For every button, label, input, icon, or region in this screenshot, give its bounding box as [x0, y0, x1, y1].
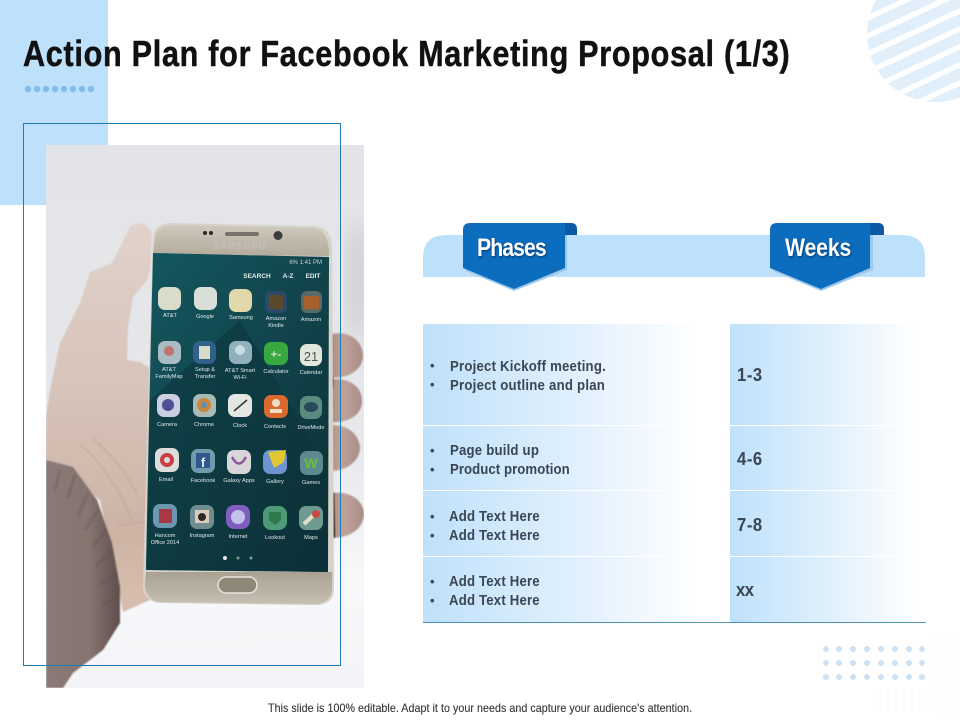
app icon grid: W	[304, 455, 318, 471]
status bar and menu: 6% 1:41 PM	[289, 260, 322, 266]
row 2 phases: Product promotion	[450, 460, 570, 477]
app labels: FamilyMap	[155, 374, 183, 380]
status bar and menu: SEARCH	[243, 273, 271, 280]
status bar and menu: A-Z	[283, 273, 293, 280]
app labels: AT&T	[162, 367, 177, 373]
ribbon: Weeks	[770, 223, 884, 291]
app labels: Chrome	[194, 422, 214, 428]
home button	[218, 577, 257, 593]
app labels: AT&T	[163, 313, 178, 319]
weeks column backgrounds	[730, 324, 926, 622]
title: Action Plan for Facebook Marketing Proposal (1/3)	[23, 35, 790, 75]
label: Phases: Phases	[477, 233, 547, 261]
app labels: Clock	[233, 423, 247, 429]
ribbon: Phases	[463, 223, 577, 291]
app labels: Lookout	[265, 535, 285, 541]
app labels: Email	[159, 477, 173, 483]
status bar and menu	[243, 260, 322, 280]
row 1 weeks: 1-3	[737, 364, 762, 385]
app labels: Amazon	[266, 316, 286, 322]
app labels: Calendar	[300, 370, 322, 376]
phone top details	[203, 231, 282, 251]
row 4 phases: Add Text Here	[449, 591, 540, 608]
page indicator dots	[223, 556, 252, 560]
app labels: Camera	[157, 422, 178, 428]
table	[423, 324, 926, 623]
app icon grid: +-	[270, 347, 282, 361]
row 2 phases	[430, 441, 570, 477]
sleeve ribbing	[54, 470, 99, 566]
row 3 phases: Add Text Here	[449, 507, 540, 524]
finger shadows at phone edge	[332, 376, 336, 539]
row 1 phases	[430, 357, 606, 393]
app icon grid: f	[201, 455, 206, 470]
table bottom rule	[423, 622, 926, 623]
app labels: Games	[302, 480, 320, 486]
app labels: Hancom	[155, 533, 176, 539]
app labels: Maps	[304, 535, 318, 541]
table header band	[423, 235, 925, 277]
decorative dots under title	[25, 86, 94, 92]
app icon grid	[153, 287, 323, 530]
decorative light blue corner block	[0, 0, 108, 205]
app labels	[151, 313, 325, 546]
app labels: AT&T Smart	[225, 368, 256, 374]
app labels: Transfer	[195, 374, 215, 380]
app labels: Setup &	[195, 367, 215, 373]
row 1 phases: Project outline and plan	[450, 376, 605, 393]
app labels: Calculator	[263, 369, 289, 375]
row 4 phases: Add Text Here	[449, 572, 540, 589]
row 4 phases	[430, 572, 540, 608]
footer note: This slide is 100% editable. Adapt it to your needs and capture your audience's attention.	[268, 703, 692, 715]
thin photo frame	[24, 124, 340, 666]
row 2 phases: •	[430, 462, 435, 477]
jumper sleeve	[46, 460, 120, 688]
app labels: Contacts	[264, 424, 286, 430]
row 2 phases: Page build up	[450, 441, 539, 458]
app labels: Office 2014	[151, 540, 179, 546]
phone screen	[146, 253, 329, 572]
palm creases	[80, 438, 136, 511]
row 2 weeks: 4-6	[737, 448, 762, 469]
row 4 phases: •	[430, 574, 435, 589]
row 3 weeks: 7-8	[737, 514, 762, 535]
app labels: Amazon	[301, 317, 321, 323]
row 4 phases: •	[430, 593, 435, 608]
row 3 phases	[430, 507, 540, 543]
app labels: Facebook	[191, 478, 215, 484]
row 3 phases: •	[430, 528, 435, 543]
app labels: Galaxy Apps	[223, 478, 255, 484]
app labels: Internet	[229, 534, 248, 540]
label: Weeks: Weeks	[785, 233, 851, 261]
photo: hand holding smartphone	[46, 145, 370, 688]
row 3 phases: Add Text Here	[449, 526, 540, 543]
app labels: Wi-Fi	[233, 375, 247, 381]
app labels: Gallery	[266, 479, 284, 485]
phone top details: SAMSUNG	[213, 241, 267, 251]
status bar and menu: EDIT	[306, 273, 320, 280]
row 1 phases: •	[430, 377, 435, 392]
row 1 phases: Project Kickoff meeting.	[450, 357, 606, 374]
app icon grid: 21	[304, 349, 318, 364]
row 3 phases: •	[430, 509, 435, 524]
decorative dot grid bottom right	[823, 632, 954, 716]
row 4 weeks: xx	[736, 579, 754, 600]
decorative striped circle	[867, 0, 960, 102]
app labels: Samsung	[229, 315, 253, 321]
phases column backgrounds	[423, 324, 729, 622]
app labels: Google	[196, 314, 214, 320]
row 2 phases: •	[430, 443, 435, 458]
app labels: Kindle	[268, 323, 284, 329]
smartphone	[143, 223, 334, 605]
hand, palm and thumb	[46, 223, 152, 612]
app labels: Instagram	[190, 533, 215, 539]
row 1 phases: •	[430, 358, 435, 373]
app labels: DriveMode	[297, 425, 325, 431]
fingers behind phone	[332, 332, 364, 538]
